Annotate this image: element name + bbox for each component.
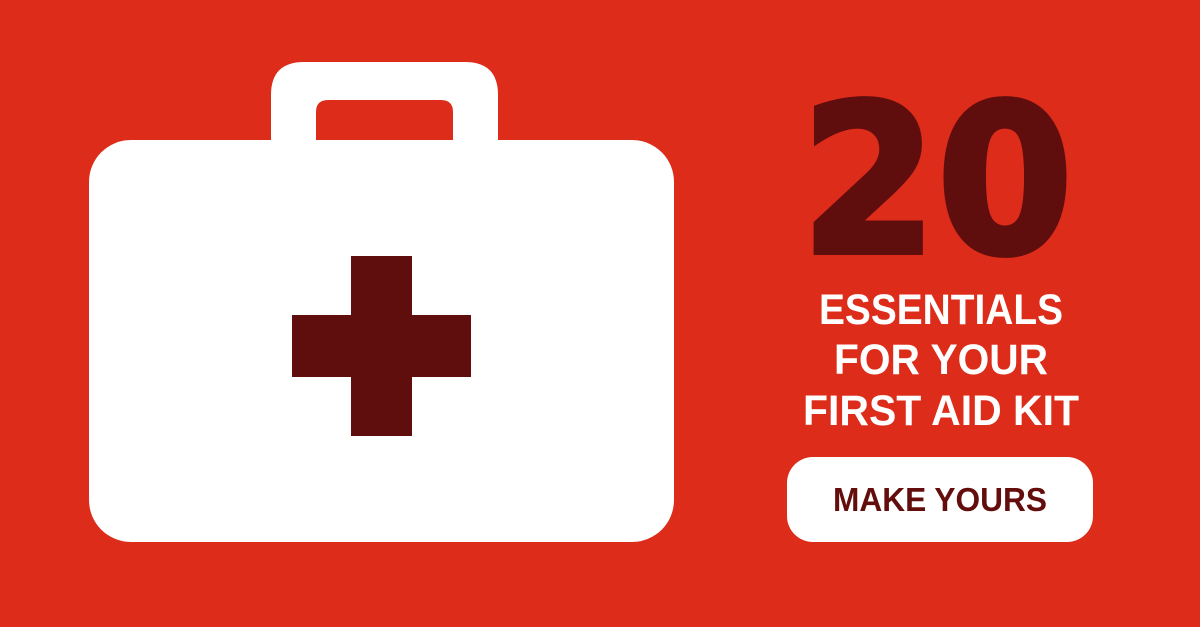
kit handle xyxy=(271,62,498,145)
kit body xyxy=(89,140,674,542)
heading: FIRST AID KIT xyxy=(803,387,1079,435)
heading: ESSENTIALS xyxy=(819,286,1063,334)
heading: FOR YOUR xyxy=(834,336,1048,384)
medical cross xyxy=(292,256,471,436)
button: make yours xyxy=(787,457,1093,542)
number 20: 20 xyxy=(801,61,1073,301)
heading xyxy=(803,286,1079,435)
button: make yours: MAKE YOURS xyxy=(833,481,1047,518)
icon: first aid kit xyxy=(89,62,674,542)
